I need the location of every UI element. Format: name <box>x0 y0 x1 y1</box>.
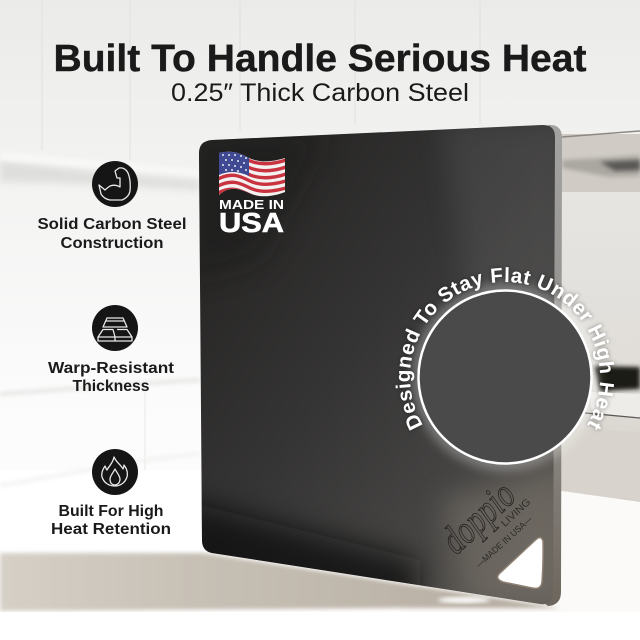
icon: American flag <box>219 152 285 196</box>
right side cabinets <box>556 131 640 502</box>
icon: flexed arm <box>92 161 138 207</box>
triangular hang hole <box>498 538 543 588</box>
feature: warp-resistant: Thickness <box>72 378 150 395</box>
title: Built To Handle Serious Heat <box>54 38 587 80</box>
icon: metal bars <box>92 305 138 351</box>
callout: zoomed steel surface circle <box>395 267 616 476</box>
engraved doppio living logo: —MADE IN USA— <box>474 514 534 570</box>
subtitle: 0.25″ Thick Carbon Steel <box>171 79 469 107</box>
text: made in: MADE IN <box>219 197 284 212</box>
feature: heat retention <box>51 449 171 538</box>
curved caption: Designed To Stay Flat Under High Heat <box>395 267 616 432</box>
feature: solid carbon steel: Construction <box>60 235 164 252</box>
feature: solid carbon steel <box>38 161 186 252</box>
label: Solid Carbon Steel <box>38 216 186 233</box>
board edge <box>540 125 562 606</box>
label: Built For High <box>58 503 164 520</box>
feature: heat retention: Heat Retention <box>51 521 171 538</box>
icon: flame <box>92 449 138 495</box>
badge: made in USA <box>219 152 285 232</box>
feature: warp-resistant <box>48 305 174 395</box>
cutting board: carbon steel <box>199 124 562 606</box>
board face <box>199 125 555 604</box>
label: Warp-Resistant <box>48 360 174 377</box>
engraved doppio living logo: LIVING <box>499 497 533 529</box>
text: USA: USA <box>219 207 284 238</box>
engraved doppio living logo: doppio <box>432 472 524 562</box>
board shading <box>180 120 570 620</box>
magnified circle <box>418 290 592 464</box>
countertop <box>0 491 640 640</box>
